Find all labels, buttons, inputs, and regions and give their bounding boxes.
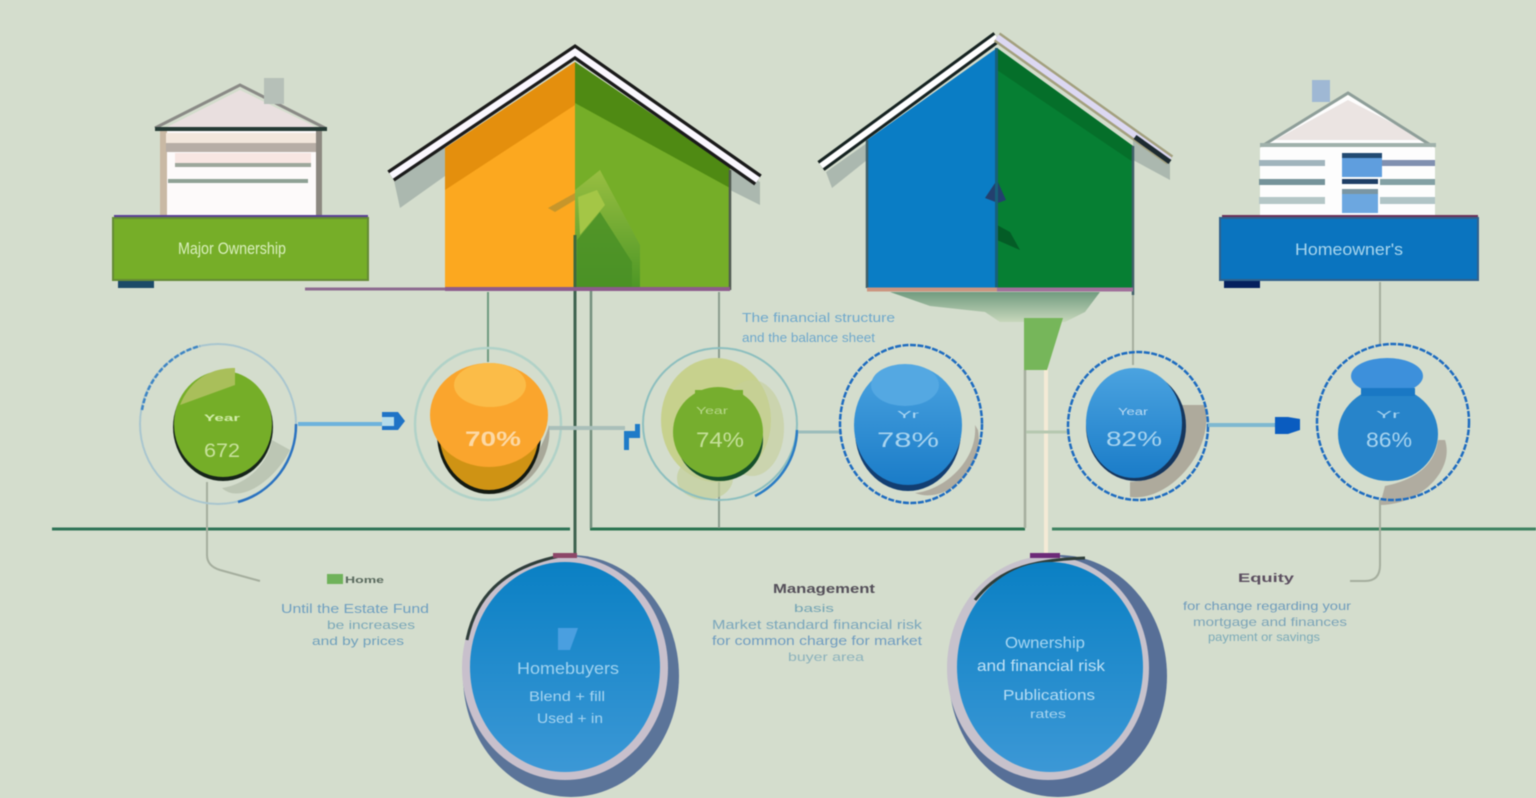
banner: green label [113, 215, 368, 288]
top highlight [454, 363, 526, 407]
roof highlight [391, 52, 758, 180]
shadow [463, 555, 679, 797]
outer ring [840, 345, 982, 503]
value: 78% [877, 429, 939, 452]
eave shade: orange [445, 62, 575, 190]
dark ring edge [467, 556, 560, 640]
caption line three: for common charge for market [712, 633, 922, 648]
top cap [1030, 553, 1060, 558]
circle line one: Blend + fill [529, 688, 605, 704]
disc highlight [180, 368, 235, 405]
base line [445, 287, 730, 291]
value: 82% [1106, 428, 1162, 451]
circle title: Homebuyers [517, 659, 619, 678]
connector: step 4 to 5 [1026, 430, 1070, 434]
blue disc [1086, 368, 1182, 478]
value: 74% [696, 429, 744, 452]
connector: step 3 to 4 [798, 430, 842, 434]
value label: Year [696, 406, 729, 417]
outer ring [140, 344, 296, 504]
centre emblem [985, 180, 1020, 250]
caption marker [327, 574, 343, 584]
roof right highlight [997, 37, 1170, 160]
green disc [673, 387, 763, 477]
silver ring [462, 556, 668, 780]
base line [867, 288, 997, 292]
large orange and green house [391, 52, 760, 290]
circle line two: Used + in [537, 710, 603, 726]
roof outline [391, 52, 758, 180]
caption line one: basis [794, 603, 835, 615]
large blue circle: centre right [947, 553, 1167, 797]
callout text above middle circles [742, 311, 895, 345]
large blue and green house [821, 37, 1170, 370]
caption title: Equity [1238, 571, 1294, 585]
centre seam [574, 235, 576, 289]
banner: blue label: Homeowner's [1295, 240, 1403, 259]
green disc [174, 371, 272, 477]
house wall: green [575, 62, 730, 289]
blue disc [854, 365, 962, 485]
black lower edge [173, 373, 273, 481]
caption line one: Until the Estate Fund [281, 601, 429, 616]
blue disc [470, 562, 660, 772]
caption line three: payment or savings [1208, 630, 1320, 644]
step 1: green circle [140, 344, 296, 504]
right halo [720, 380, 784, 476]
funnel shadow [890, 292, 1100, 322]
large blue circle: centre left [462, 553, 679, 797]
arrow: step 5 to 6 [1208, 417, 1300, 434]
shadow [949, 555, 1167, 797]
top green shoulder [695, 390, 743, 420]
top cap [553, 553, 577, 558]
blue disc [957, 562, 1143, 772]
banner: green label: Major Ownership [178, 239, 286, 258]
lower halo [677, 456, 733, 500]
step 4: blue circle [840, 345, 982, 503]
value label: Year [1118, 407, 1149, 418]
caption line three: and by prices [312, 634, 404, 648]
shadow crescent [222, 440, 290, 494]
caption line two: Market standard financial risk [712, 617, 923, 632]
dark ring edge [975, 558, 1085, 600]
dark orange base [439, 372, 539, 490]
icon: right small house [1259, 80, 1436, 215]
lower blue disc [1338, 387, 1438, 481]
circle line one: and financial risk [977, 658, 1106, 675]
outer ring [643, 348, 797, 500]
text block: middle caption [712, 581, 923, 664]
silver ring [947, 556, 1149, 780]
value: 672 [204, 441, 240, 462]
circle title: Ownership [1005, 635, 1085, 652]
text block: right caption [1183, 571, 1351, 644]
step 5: blue circle [1068, 352, 1208, 500]
caption line two: mortgage and finances [1193, 615, 1347, 629]
dark rim [855, 371, 961, 491]
text block: left caption [281, 574, 429, 648]
caption title: Management [773, 581, 876, 596]
step 6: blue circle [1317, 344, 1469, 505]
shadow crescent [915, 425, 979, 495]
roof shadow left [393, 144, 445, 208]
roof shadow right [730, 165, 760, 205]
centre arrow emblem [548, 170, 640, 289]
house wall: orange [445, 62, 575, 289]
orange disc [430, 363, 548, 467]
caption line one: for change regarding your [1183, 599, 1351, 613]
banner: blue label [1220, 215, 1478, 288]
value label: Yr [1376, 410, 1402, 421]
eave shade: green [997, 48, 1133, 162]
outer ring [1317, 344, 1469, 500]
callout line two: and the balance sheet [742, 331, 876, 345]
circle line three: rates [1030, 707, 1066, 721]
house wall: green [997, 48, 1133, 288]
arrow: step 2 to 3 [549, 424, 640, 450]
left small house with green banner [113, 78, 368, 288]
caption line two: be increases [327, 618, 415, 632]
caption line four: buyer area [788, 650, 864, 664]
icon: small blue marker [558, 628, 578, 650]
top highlight [871, 364, 939, 406]
outer ring top arc [142, 346, 200, 410]
shadow edge [490, 425, 549, 494]
step 3: green circle with halo [643, 348, 797, 500]
eave shade: green [575, 62, 730, 188]
outer ring blue arc [755, 430, 797, 496]
right small house with blue banner [1220, 80, 1478, 288]
green funnel tip [1024, 318, 1063, 370]
dark rim [677, 399, 763, 481]
base line right [997, 288, 1133, 292]
step 2: orange circle [415, 348, 561, 500]
top blue dome [1351, 358, 1423, 394]
right wall edge [729, 170, 731, 290]
roof right end cap [1135, 137, 1170, 162]
caption title: Home [345, 575, 384, 585]
roof highlight [821, 37, 997, 166]
timeline connector lines [52, 282, 1536, 581]
halo [661, 358, 771, 482]
centre seam [995, 48, 998, 288]
shadow crescent [1130, 405, 1206, 497]
value label: Year [204, 413, 241, 423]
roof shadow right [1133, 138, 1170, 180]
shadow crescent [1380, 440, 1447, 505]
value: 86% [1366, 429, 1412, 452]
callout line one: The financial structure [742, 311, 895, 325]
outer ring blue arc [238, 424, 296, 502]
icon: left small house [155, 78, 327, 216]
circle line two: Publications [1003, 687, 1095, 704]
value label: Yr [897, 410, 920, 421]
roof right side [997, 37, 1170, 160]
value: 70% [465, 428, 521, 451]
outer ring [415, 348, 561, 500]
house wall: blue [867, 48, 997, 288]
outer wall edges [867, 140, 1133, 295]
roof shadow left [826, 143, 867, 188]
arrow: step 1 to 2 [298, 412, 405, 430]
black base [437, 374, 541, 494]
roof outline [821, 37, 997, 166]
dark rim [1086, 371, 1186, 481]
dome neck [1361, 388, 1415, 396]
outer ring [1068, 352, 1208, 500]
